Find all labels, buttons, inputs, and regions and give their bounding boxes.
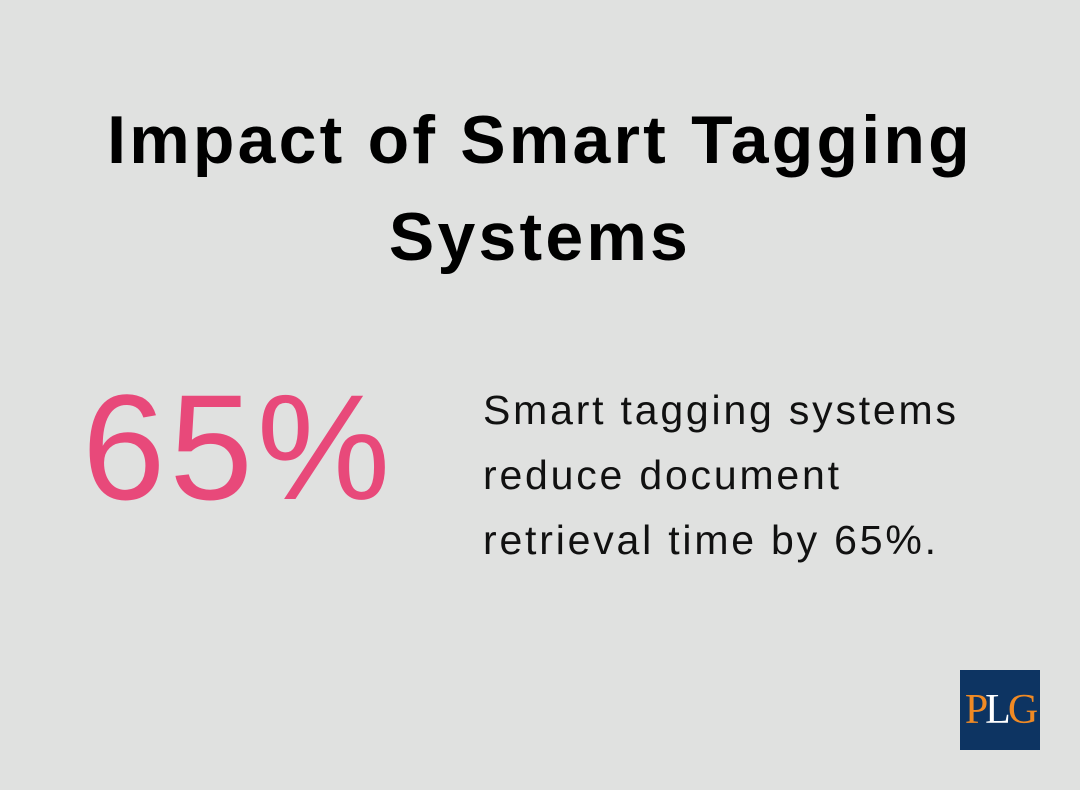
logo: PLG	[960, 670, 1040, 750]
description text: retrieval time by 65%.	[483, 517, 939, 563]
logo: PLG: PLG	[965, 687, 1035, 733]
title: Impact of Smart Tagging	[107, 102, 973, 178]
description text: reduce document	[483, 452, 842, 498]
description text: Smart tagging systems	[483, 387, 959, 433]
big statistic: 65%	[82, 363, 394, 531]
title	[107, 102, 973, 275]
description text	[483, 387, 959, 563]
title: Systems	[389, 199, 691, 275]
